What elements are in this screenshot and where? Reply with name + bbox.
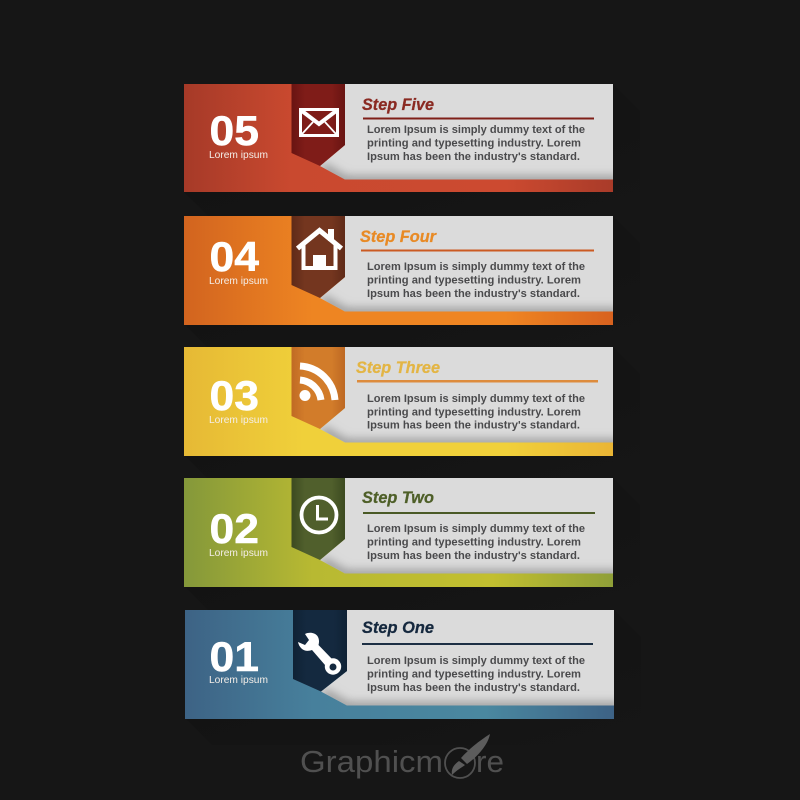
heading: Step Two <box>362 488 434 507</box>
icon: rss <box>300 366 335 401</box>
body text: Lorem Ipsum is simply dummy text of the <box>367 124 585 136</box>
ribbon <box>292 216 345 298</box>
body text: printing and typesetting industry. Lorem <box>367 138 581 150</box>
ribbon <box>292 347 345 429</box>
card: step three <box>184 347 613 456</box>
logo: Graphicmore <box>300 734 504 779</box>
body text: Lorem Ipsum is simply dummy text of the <box>367 655 585 667</box>
body text: Ipsum has been the industry's standard. <box>367 550 580 562</box>
logo: Graphicmore: re <box>476 744 504 779</box>
heading: Step Five <box>362 95 434 114</box>
body text: Ipsum has been the industry's standard. <box>367 288 580 300</box>
card: step four <box>184 216 613 325</box>
body text <box>367 655 585 694</box>
body text <box>367 261 585 300</box>
body text: Lorem Ipsum is simply dummy text of the <box>367 393 585 405</box>
card: step one <box>185 610 614 719</box>
body text <box>367 124 585 163</box>
ribbon <box>293 610 347 692</box>
body text: Lorem Ipsum is simply dummy text of the <box>367 261 585 273</box>
body text: Lorem Ipsum is simply dummy text of the <box>367 523 585 535</box>
card: step two <box>184 478 613 587</box>
icon: house <box>298 229 342 268</box>
caption: Lorem ipsum <box>209 674 268 686</box>
body text <box>367 523 585 562</box>
card: step five <box>184 84 613 192</box>
heading: Step One <box>362 618 434 637</box>
heading: Step Three <box>356 358 440 377</box>
icon: brush in letter o <box>445 734 490 778</box>
icon: envelope <box>300 110 338 136</box>
number: 03 <box>210 372 259 419</box>
caption: Lorem ipsum <box>209 414 268 426</box>
body text: Ipsum has been the industry's standard. <box>367 682 580 694</box>
body text: printing and typesetting industry. Lorem <box>367 274 581 286</box>
ribbon <box>292 478 345 560</box>
caption: Lorem ipsum <box>209 149 268 161</box>
icon: wrench <box>298 633 341 675</box>
ribbon <box>292 84 345 166</box>
number: 02 <box>210 505 259 552</box>
body text: printing and typesetting industry. Lorem <box>367 668 581 680</box>
number: 01 <box>210 633 259 680</box>
body text: printing and typesetting industry. Lorem <box>367 536 581 548</box>
number: 05 <box>210 107 259 154</box>
icon: clock <box>302 498 336 532</box>
body text <box>367 393 585 432</box>
logo: Graphicmore: Graphicm <box>300 744 443 779</box>
heading: Step Four <box>360 227 437 246</box>
caption: Lorem ipsum <box>209 547 268 559</box>
body text: Ipsum has been the industry's standard. <box>367 420 580 432</box>
caption: Lorem ipsum <box>209 275 268 287</box>
body text: printing and typesetting industry. Lorem <box>367 406 581 418</box>
number: 04 <box>210 233 260 280</box>
body text: Ipsum has been the industry's standard. <box>367 151 580 163</box>
